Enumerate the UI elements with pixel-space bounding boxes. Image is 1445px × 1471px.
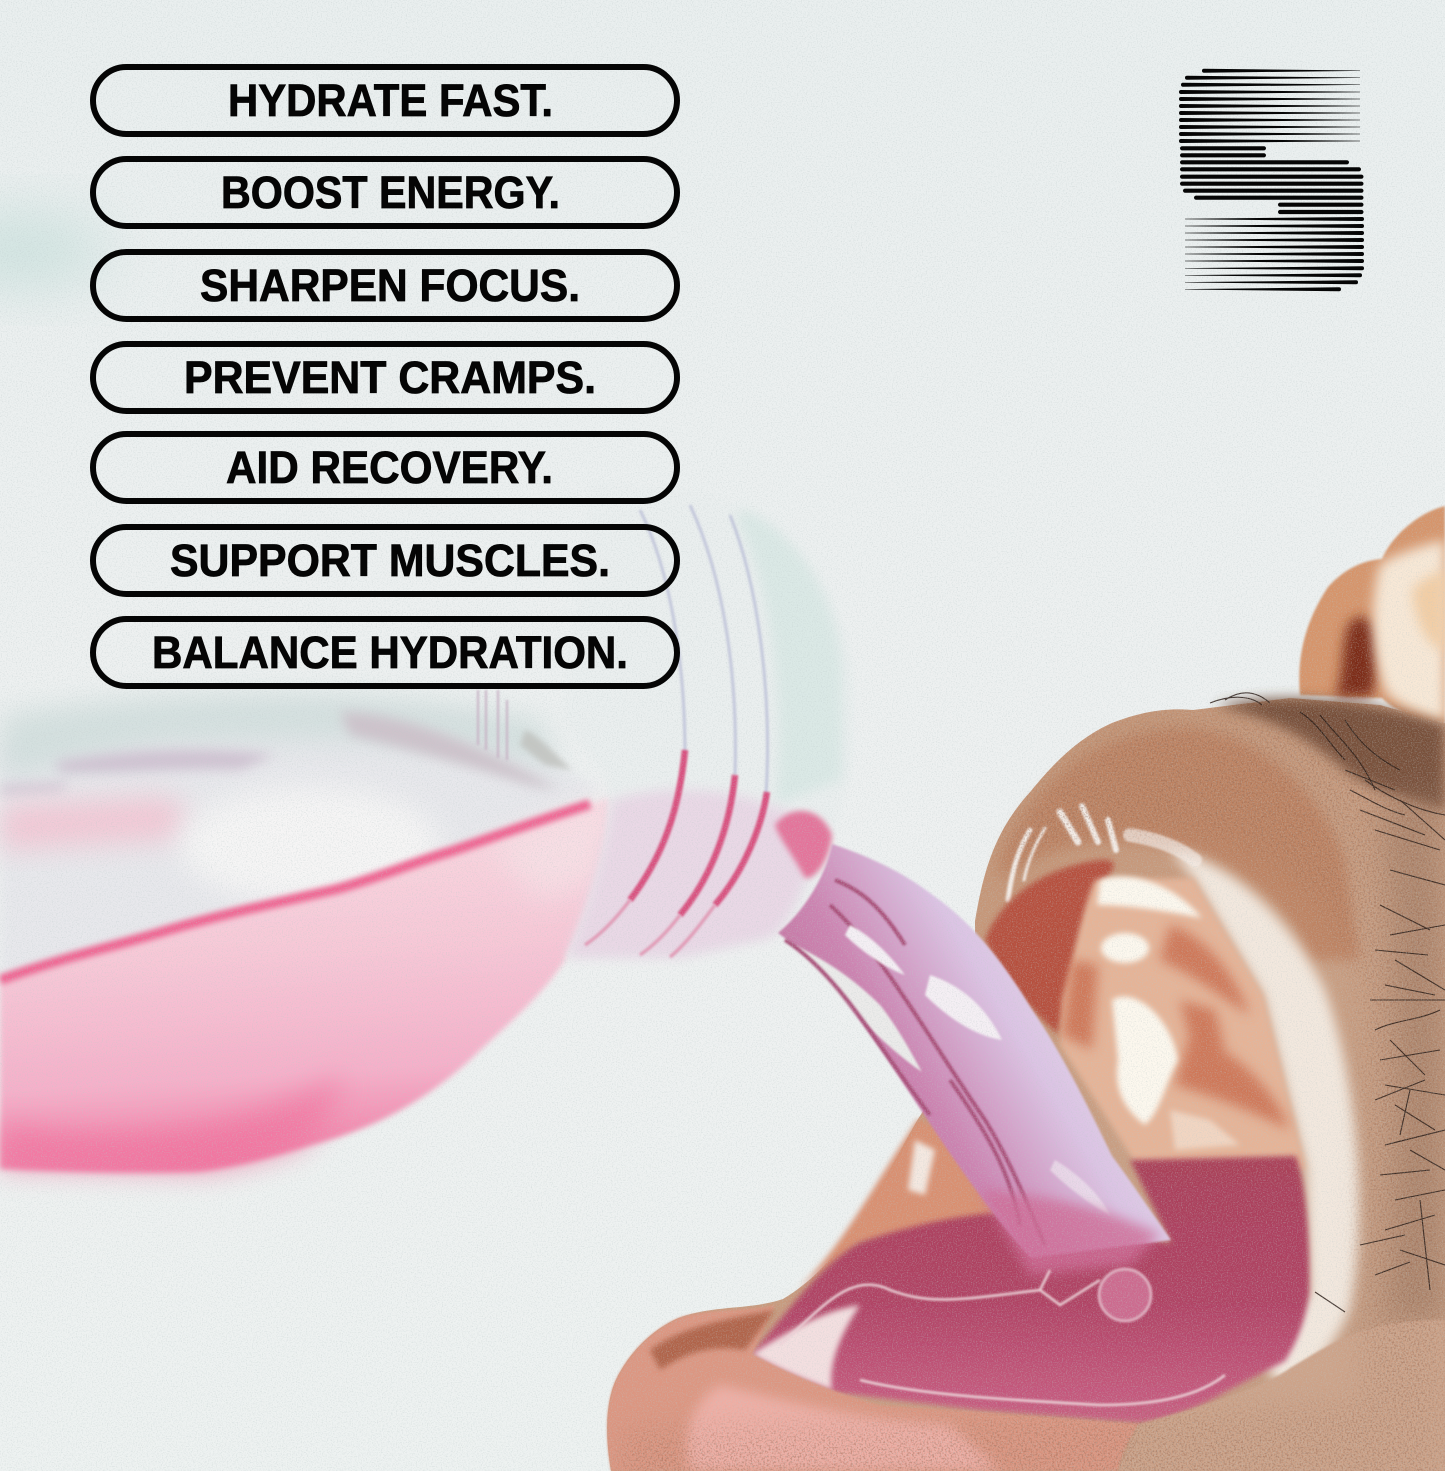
- pill: sharpen focus: [93, 252, 677, 319]
- liquid surface line: [0, 804, 590, 980]
- photo: pool reflections and bubble: [780, 1269, 1225, 1405]
- lavender smudges: [0, 712, 560, 795]
- palate red folds: [1062, 925, 1290, 1130]
- beard hairs: [1210, 693, 1445, 1312]
- lower neck tint: [566, 790, 820, 958]
- nose: [1299, 506, 1445, 723]
- pale pink patch: [0, 797, 188, 850]
- upper mouth palate: [1060, 878, 1306, 1170]
- white highlight: [180, 787, 440, 903]
- thread: pale violet arcs: [640, 505, 768, 795]
- white splash left: [752, 1305, 860, 1390]
- liquid bottom saturation: [0, 1075, 345, 1172]
- liquid right side fade: [490, 797, 612, 900]
- pill: aid recovery: AID RECOVERY.: [226, 442, 553, 493]
- chin skin: [1118, 1320, 1445, 1471]
- skin silhouette: [607, 698, 1445, 1471]
- pill: boost energy: [93, 159, 677, 226]
- beard shading: [1380, 790, 1445, 1320]
- stream dark pink veins: [785, 880, 1045, 1245]
- glass sliver in stream: [795, 945, 922, 1072]
- pill: boost energy: BOOST ENERGY.: [221, 167, 560, 218]
- white liquid reflections: [780, 1270, 1225, 1405]
- bubble: [1099, 1269, 1151, 1321]
- cap mint face: [735, 510, 842, 805]
- pill: support muscles: SUPPORT MUSCLES.: [170, 535, 610, 586]
- icon: striped S logo: [1179, 69, 1364, 291]
- inner lip white spots: [908, 1140, 935, 1195]
- mouth liquid: [751, 1156, 1309, 1423]
- photo: pink liquid stream: [778, 844, 1171, 1275]
- skin pore texture: [600, 690, 1445, 1471]
- white streaks in stream: [845, 925, 1110, 1215]
- pill: hydrate fast: HYDRATE FAST.: [228, 75, 553, 126]
- thread: faint ring tails: [585, 900, 715, 957]
- pill: aid recovery: [93, 434, 677, 501]
- pill: balance hydration: BALANCE HYDRATION.: [152, 627, 628, 678]
- red inner lip: [985, 860, 1114, 1034]
- pill: prevent cramps: [93, 344, 677, 411]
- nose side tone: [1412, 570, 1445, 650]
- bottle upper body, empty: [0, 705, 600, 985]
- photo: bottle pouring pink drink: [0, 212, 612, 1173]
- grey neck shadow: [520, 730, 572, 770]
- pill: hydrate fast: [93, 67, 677, 134]
- mint haze upper left: [0, 212, 110, 288]
- nostril shadow: [1335, 617, 1378, 697]
- stream body: [778, 844, 1171, 1258]
- pill: prevent cramps: PREVENT CRAMPS.: [184, 352, 596, 403]
- lower lip shadow: [650, 1310, 775, 1370]
- upper lip band: [1000, 728, 1360, 960]
- bottle ridges: [478, 690, 507, 760]
- pill: balance hydration: [93, 619, 677, 686]
- lip highlights: [1008, 806, 1195, 900]
- nose highlight: [1373, 540, 1445, 722]
- lower lip tone: [687, 1385, 1000, 1471]
- neck glass: [560, 482, 855, 958]
- pale rim right of mouth: [1170, 850, 1359, 1390]
- thread: pink rings: [630, 750, 767, 915]
- photo: lips, mouth and face: [600, 506, 1445, 1471]
- lower left inner lip: [783, 1119, 1020, 1299]
- bottle shoulder tint: [0, 693, 560, 780]
- teeth highlights: [1097, 876, 1240, 1150]
- pill: sharpen focus: SHARPEN FOCUS.: [200, 260, 580, 311]
- mustache shadow: [1215, 698, 1445, 810]
- pill: support muscles: [93, 527, 677, 594]
- benefit list: [93, 67, 677, 686]
- photo: bottle neck and threads: [478, 482, 855, 958]
- pink pool in cap: [775, 811, 832, 878]
- lower lip: [607, 1305, 1139, 1471]
- stream base blending into pool: [980, 1190, 1160, 1275]
- pink liquid in bottle: [0, 797, 612, 1173]
